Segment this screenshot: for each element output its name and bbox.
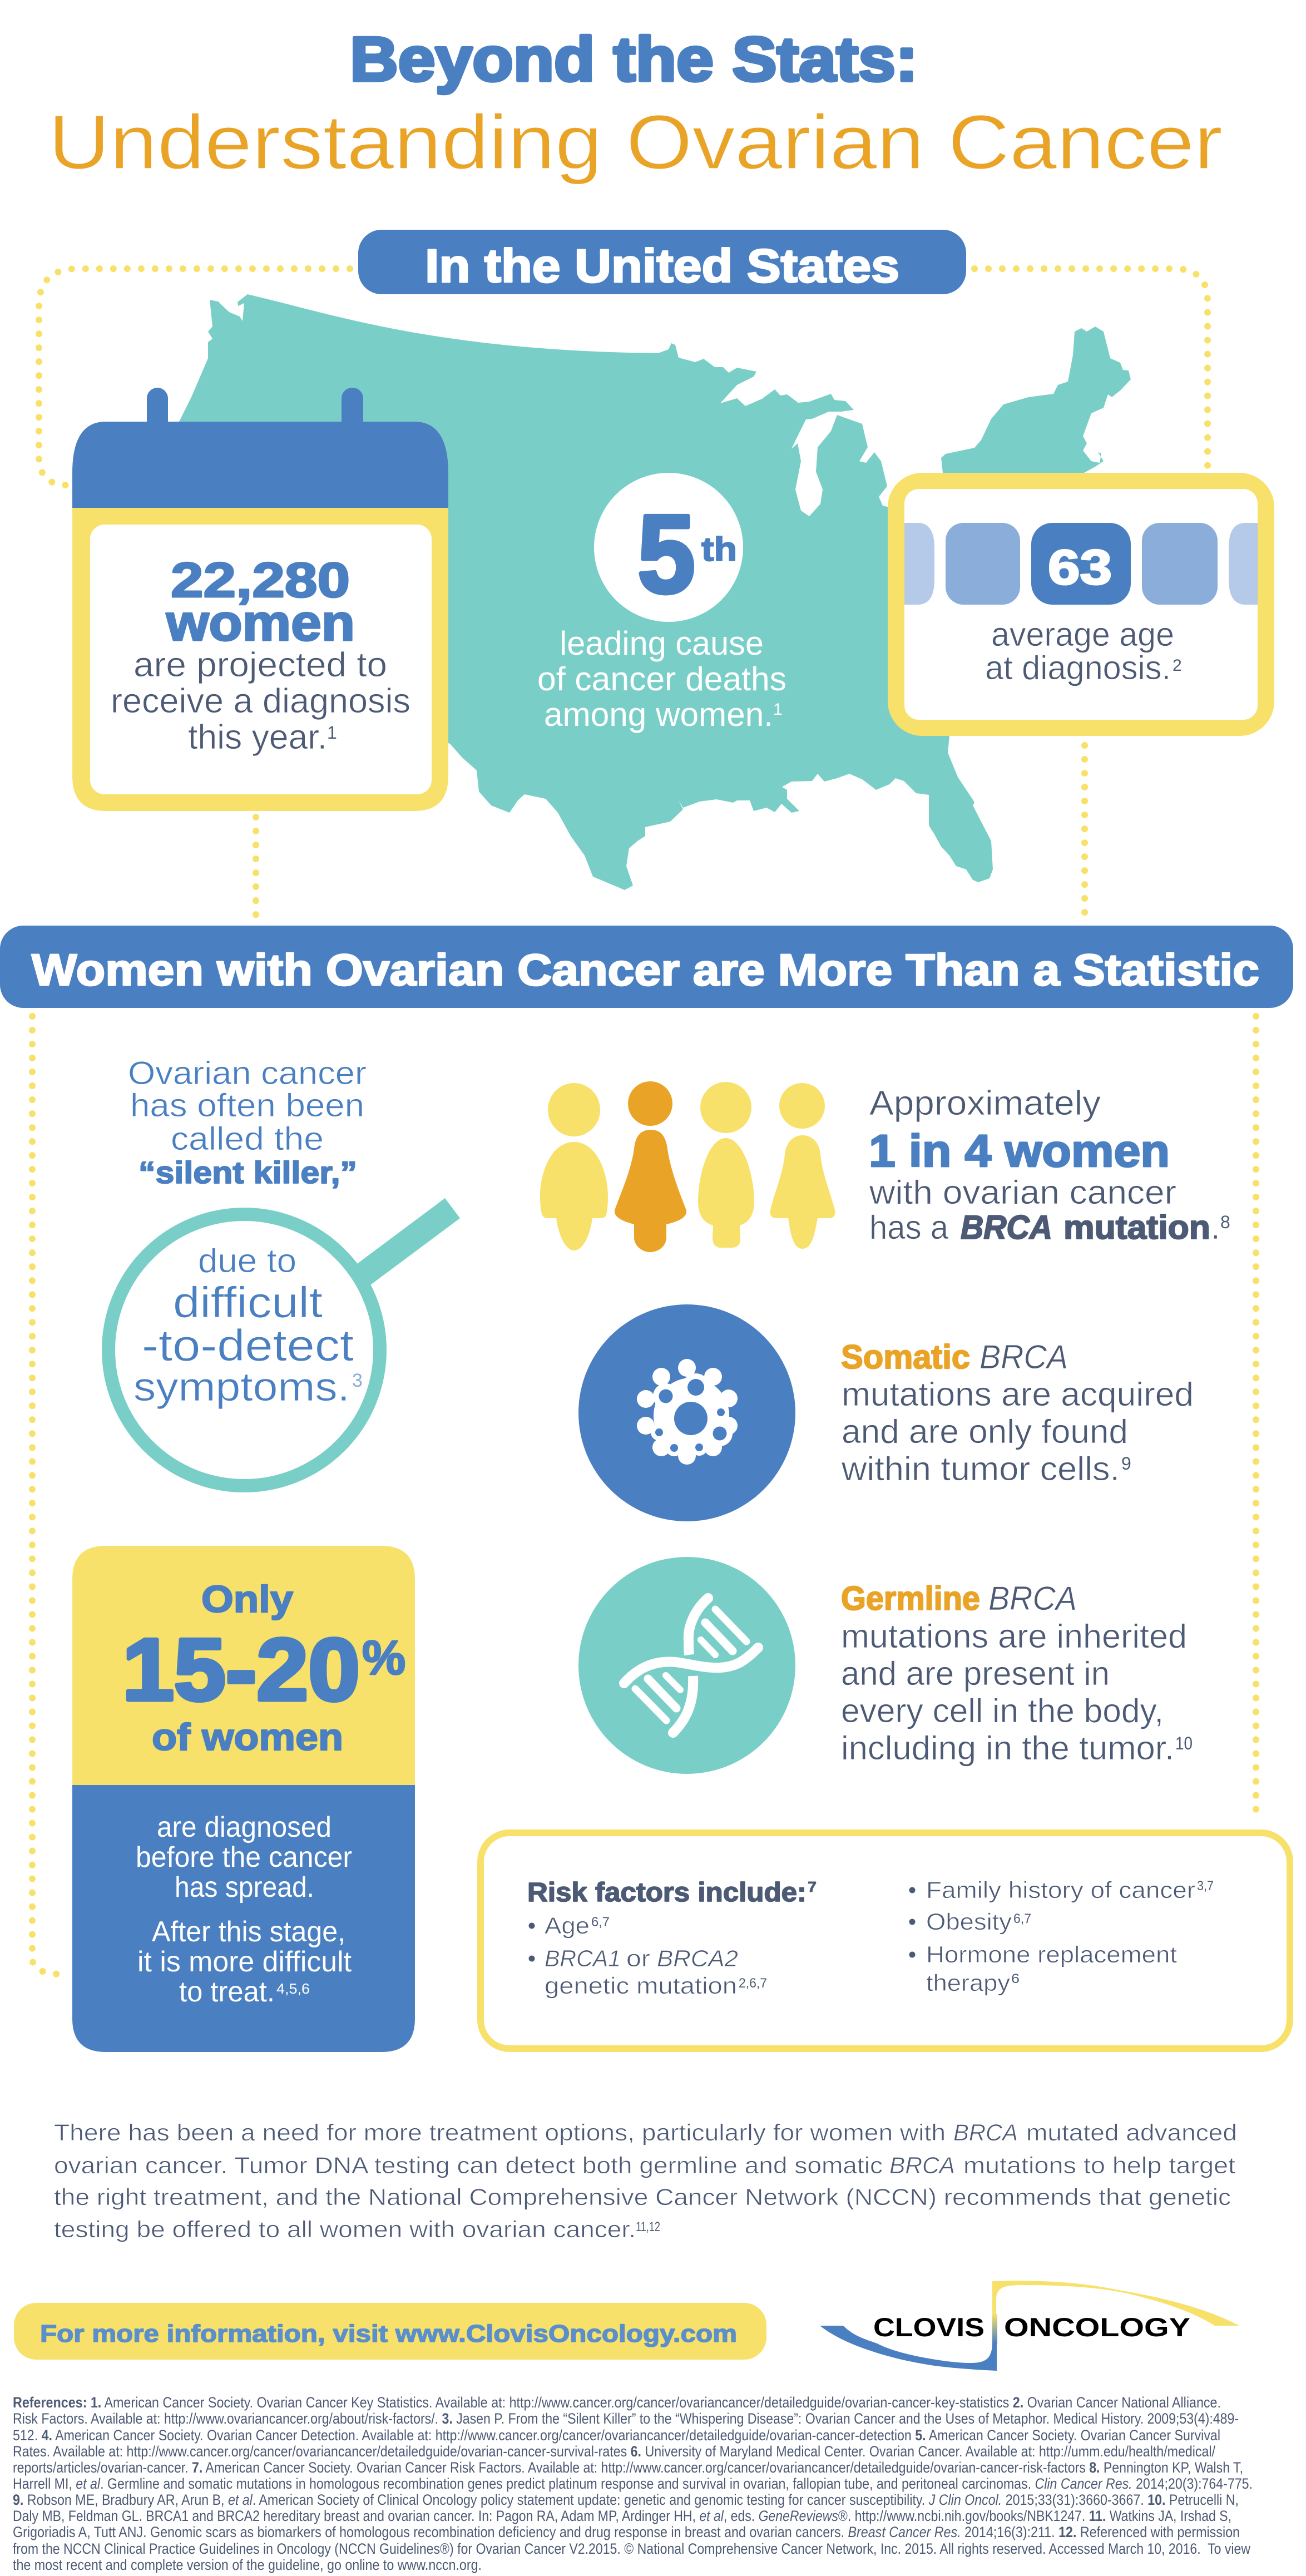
logo: Clovis Oncology: ONCOLOGY xyxy=(1004,2312,1190,2342)
text: somatic BRCA: and are only found xyxy=(842,1413,1128,1450)
text: references: References: 1. American Cancer Society. Ovarian Cancer Key Statistics. Available at: http://www.cancer.org/cancer/ovariancancer/detailedguide/ovarian-cancer-key-statistics 2. Ovarian Cancer National Alliance. xyxy=(13,2394,1221,2411)
text: diagnosis stage: to treat. xyxy=(179,1976,275,2008)
text: 1 in 4 women: 8 xyxy=(1220,1212,1230,1232)
stat: 15-20% xyxy=(122,1578,405,1758)
text: references: Harrell MI, et al. Germline and somatic mutations in homologous recombination genes predict platinum response and survival in ovarian, fallopian tube, and peritoneal carcinomas. Clin Cancer Res. 2014;20(3):764-775. xyxy=(13,2475,1253,2492)
text: germline BRCA: 10 xyxy=(1175,1733,1193,1753)
text: germline BRCA: Germline xyxy=(841,1580,980,1617)
list: risk factors left: or xyxy=(626,1945,650,1971)
text: silent killer: Ovarian cancer xyxy=(128,1055,367,1091)
text: leading cause of cancer deaths: among women. xyxy=(544,696,773,733)
text: leading cause of cancer deaths xyxy=(537,625,786,733)
text: diagnosis stage: 4,5,6 xyxy=(276,1980,310,1997)
stat: 22,280 women: women xyxy=(166,595,355,651)
text: diagnosis projection xyxy=(111,646,410,757)
text: 1 in 4 women xyxy=(869,1084,1230,1246)
text: difficult-to-detect symptoms: due to xyxy=(198,1242,296,1279)
text: germline BRCA: including in the tumor. xyxy=(841,1729,1174,1767)
text: 1 in 4 women: . xyxy=(1211,1209,1220,1246)
text: somatic BRCA xyxy=(841,1338,1194,1487)
text: leading cause of cancer deaths: 1 xyxy=(773,700,783,719)
text: average age at diagnosis: at diagnosis. xyxy=(985,649,1171,686)
text: references: 9. Robson ME, Bradbury AR, Arun B, et al. American Society of Clinical Oncology policy statement update: genetic and genomic testing for cancer susceptibility. J Clin Oncol. 2015;33(31):3660-3667. 10. Petrucelli N, xyxy=(13,2491,1239,2508)
text: references: Rates. Available at: http://www.cancer.org/cancer/ovariancancer/detailedguide/ovarian-cancer-survival-rates 6. University of Maryland Medical Center. Ovarian Cancer. Available at: http://umm.edu/health/medical/ xyxy=(13,2443,1215,2460)
text: 1 in 4 women: mutation xyxy=(1063,1209,1210,1246)
text: 1 in 4 women: Approximately xyxy=(869,1084,1101,1123)
text: references xyxy=(13,2394,1253,2573)
text: average age at diagnosis xyxy=(985,616,1182,686)
text: 1 in 4 women: has a xyxy=(869,1209,949,1246)
text: diagnosis stage: has spread. xyxy=(175,1871,314,1903)
icon: DNA helix xyxy=(578,1557,795,1774)
list: risk factors right: 3,7 xyxy=(1197,1878,1214,1893)
text: somatic BRCA: BRCA xyxy=(980,1338,1068,1376)
callout: more information: For more information, visit www.ClovisOncology.com xyxy=(40,2320,737,2347)
text: germline BRCA: BRCA xyxy=(988,1580,1077,1617)
text: diagnosis projection: are projected to xyxy=(133,646,387,684)
text: difficult-to-detect symptoms xyxy=(133,1242,363,1410)
stat: 22,280 women: 22,280 xyxy=(171,552,350,607)
list: risk factors left: 2,6,7 xyxy=(739,1976,767,1991)
banner: Women with Ovarian Cancer xyxy=(0,926,1293,1008)
list: risk factors right: Hormone replacement xyxy=(926,1941,1177,1967)
text: treatment paragraph: the right treatment, and the National Comprehensive Cancer Network (NCCN) recommends that genetic xyxy=(54,2184,1231,2210)
text: average age at diagnosis: average age xyxy=(991,616,1174,653)
text: diagnosis projection: this year. xyxy=(188,718,327,757)
text: diagnosis projection: receive a diagnosis xyxy=(111,682,410,720)
text: silent killer xyxy=(128,1055,367,1190)
text: diagnosis stage: After this stage, xyxy=(152,1916,345,1948)
dotted connector: top right xyxy=(974,269,1208,467)
text: diagnosis stage: before the cancer xyxy=(136,1841,352,1873)
text: silent killer: “silent killer,” xyxy=(138,1155,357,1190)
heading: risk factors: Risk factors include: xyxy=(527,1878,807,1907)
text: diagnosis projection: 1 xyxy=(327,723,337,743)
stat: 22,280 women xyxy=(166,552,355,651)
calendar header xyxy=(72,422,448,508)
icon: calendar rings xyxy=(147,388,363,438)
text: average age at diagnosis: 2 xyxy=(1173,656,1182,675)
list: risk factors right: therapy xyxy=(926,1970,1010,1996)
text: treatment paragraph: 11,12 xyxy=(636,2219,660,2234)
text: treatment paragraph: testing be offered to all women with ovarian cancer. xyxy=(54,2216,636,2242)
card: Only 15-20% of women xyxy=(72,1546,415,2052)
text: treatment paragraph: mutated advanced xyxy=(1026,2119,1237,2145)
text: treatment paragraph xyxy=(54,2119,1237,2242)
text: diagnosis stage: are diagnosed xyxy=(157,1811,332,1843)
list: risk factors right: Obesity xyxy=(926,1908,1012,1935)
list: risk factors left xyxy=(528,1912,767,1999)
stat: 5th xyxy=(594,473,743,622)
text: treatment paragraph: mutations to help target xyxy=(963,2152,1235,2178)
text: treatment paragraph: ovarian cancer. Tumor DNA testing can detect both germline and somatic xyxy=(54,2152,883,2178)
text: diagnosis stage xyxy=(136,1811,352,2008)
logo: Clovis Oncology: CLOVIS xyxy=(873,2312,985,2342)
person 3 xyxy=(698,1082,754,1248)
list: risk factors left: Age xyxy=(545,1912,590,1939)
text: leading cause of cancer deaths: leading cause xyxy=(560,625,764,662)
dotted connector: age box to banner xyxy=(1081,745,1088,923)
text: references: Grigoriadis A, Tutt ANJ. Genomic scars as biomarkers of homologous recombination deficiency and drug response in breast and ovarian cancers. Breast Cancer Res. 2014;16(3):211. 12. Referenced with permission xyxy=(13,2524,1240,2540)
dotted connector: left side xyxy=(32,1016,62,1974)
text: references: 512. 4. American Cancer Society. Ovarian Cancer Detection. Available at: http://www.cancer.org/cancer/ovariancancer/detailedguide/ovarian-cancer-detection 5. American Cancer Society. Ovarian Cancer Survival xyxy=(13,2427,1220,2444)
text: difficult-to-detect symptoms: 3 xyxy=(352,1370,363,1391)
text: leading cause of cancer deaths: of cancer deaths xyxy=(537,660,786,698)
list: risk factors left: genetic mutation xyxy=(545,1972,737,1999)
heading: risk factors: 7 xyxy=(808,1878,817,1895)
dotted connector: top left xyxy=(39,269,350,485)
map of the United States xyxy=(179,294,1131,890)
stat: 5th: th xyxy=(701,531,737,568)
text: germline BRCA xyxy=(841,1580,1193,1767)
text: references: the most recent and complete version of the guideline, go online to www.nccn.org. xyxy=(13,2557,482,2573)
stat: 15-20%: of women xyxy=(152,1716,343,1758)
text: treatment paragraph: BRCA xyxy=(953,2119,1018,2145)
dotted connector: calendar to banner xyxy=(253,817,259,921)
card: risk factors xyxy=(481,1833,1290,2049)
pill heading: In the United States xyxy=(358,230,966,294)
text: somatic BRCA: within tumor cells. xyxy=(841,1450,1120,1487)
list: risk factors right: 6 xyxy=(1011,1971,1020,1986)
stat: 63: 63 xyxy=(1048,540,1112,595)
text: 1 in 4 women: 1 in 4 women xyxy=(869,1126,1170,1176)
list: risk factors left: 6,7 xyxy=(591,1915,610,1930)
stat: 15-20%: 15-20 xyxy=(122,1621,360,1719)
person 1 xyxy=(540,1083,608,1250)
text: somatic BRCA: mutations are acquired xyxy=(842,1376,1194,1413)
calendar page xyxy=(90,525,432,794)
stat: 5th: 5 xyxy=(637,492,695,616)
subtitle: Understanding Ovarian Cancer: Understanding Ovarian Cancer xyxy=(48,100,1223,185)
text: somatic BRCA: Somatic xyxy=(841,1338,970,1376)
list: risk factors right: 6,7 xyxy=(1013,1911,1031,1926)
banner: Women with Ovarian Cancer: Women with Ovarian Cancer are More Than a Statistic xyxy=(32,945,1259,995)
text: somatic BRCA: 9 xyxy=(1121,1453,1131,1474)
dotted connector: right side xyxy=(1253,1016,1259,1821)
text: references: Daly MB, Feldman GL. BRCA1 and BRCA2 hereditary breast and ovarian cancer. In: Pagon RA, Adam MP, Ardinger HH, et al, eds. GeneReviews®. http://www.ncbi.nih.gov/books/NBK1247. 11. Watkins JA, Irshad S, xyxy=(13,2508,1231,2524)
list: risk factors right xyxy=(909,1877,1214,1996)
text: germline BRCA: mutations are inherited xyxy=(841,1618,1187,1655)
callout: more information xyxy=(14,2303,766,2360)
text: 1 in 4 women: BRCA xyxy=(961,1209,1052,1246)
text: silent killer: has often been xyxy=(130,1087,364,1124)
text: germline BRCA: and are present in xyxy=(841,1655,1110,1692)
icon: four women xyxy=(540,1081,835,1252)
list: risk factors right: Family history of cancer xyxy=(926,1877,1195,1903)
person 2: highlighted xyxy=(615,1081,686,1252)
text: treatment paragraph: There has been a need for more treatment options, particularly for women with xyxy=(54,2119,946,2145)
list: risk factors left: BRCA2 xyxy=(657,1945,738,1971)
icon: magnifying glass xyxy=(108,1198,460,1486)
calendar frame xyxy=(72,422,448,811)
calendar card xyxy=(72,388,448,811)
text: difficult-to-detect symptoms: difficult xyxy=(173,1278,323,1327)
text: germline BRCA: every cell in the body, xyxy=(841,1692,1164,1729)
card: average age xyxy=(888,473,1274,736)
text: difficult-to-detect symptoms: -to-detect xyxy=(142,1321,354,1370)
text: treatment paragraph: BRCA xyxy=(889,2152,955,2178)
stat: 15-20%: % xyxy=(362,1631,405,1685)
text: references: reports/articles/ovarian-cancer. 7. American Cancer Society. Ovarian Cancer Risk Factors. Available at: http://www.cancer.org/cancer/ovariancancer/detailedguide/ovarian-cancer-risk-factors 8. Pennington KP, Walsh T, xyxy=(13,2459,1243,2476)
pill heading: In the United States: In the United States xyxy=(425,240,899,292)
text: diagnosis stage: it is more difficult xyxy=(137,1946,352,1978)
stat: 15-20%: Only xyxy=(201,1578,293,1620)
logo: Clovis Oncology xyxy=(820,2281,1239,2371)
age pills xyxy=(904,523,1258,605)
icon: tumor cell xyxy=(578,1304,795,1521)
list: risk factors left: BRCA1 xyxy=(545,1945,621,1971)
text: silent killer: called the xyxy=(171,1121,324,1157)
title: Beyond the Stats: Beyond the Stats: xyxy=(350,24,918,94)
person 4 xyxy=(770,1083,835,1249)
text: difficult-to-detect symptoms: symptoms. xyxy=(133,1365,350,1410)
text: 1 in 4 women: with ovarian cancer xyxy=(869,1174,1176,1211)
